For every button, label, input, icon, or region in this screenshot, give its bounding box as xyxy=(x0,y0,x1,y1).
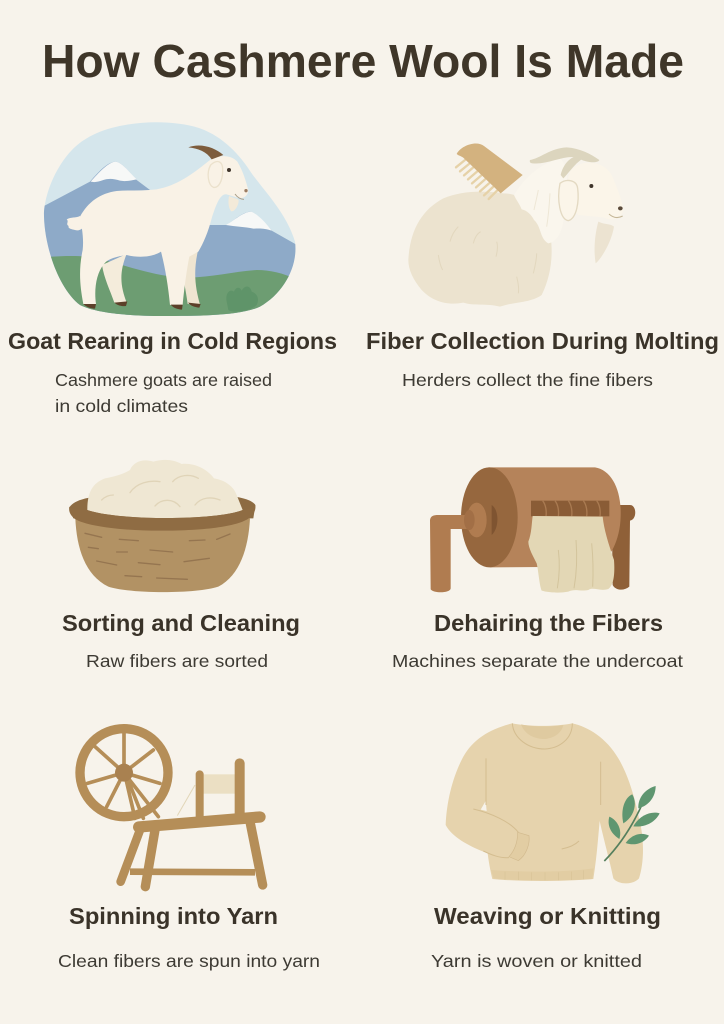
tail xyxy=(67,216,85,230)
icon: basket of raw fibers xyxy=(69,460,255,592)
horns xyxy=(530,147,599,164)
heading: Goat Rearing in Cold Regions xyxy=(8,328,337,354)
fleece body xyxy=(408,192,552,307)
description: Cashmere goats are raised xyxy=(55,370,272,390)
leaf sprig xyxy=(604,786,660,861)
description: Herders collect the fine fibers xyxy=(402,370,653,390)
ear xyxy=(208,162,223,187)
eye and mouth xyxy=(227,168,231,172)
fiber sheet xyxy=(528,516,614,593)
basket body xyxy=(75,518,250,592)
icon: fluffy goat and comb xyxy=(408,144,623,307)
armpit gap xyxy=(481,801,487,811)
head xyxy=(568,163,623,219)
panel: sorting and cleaning xyxy=(62,460,300,671)
hem xyxy=(491,868,594,880)
panel: fiber collection xyxy=(366,144,719,390)
hooves xyxy=(83,301,201,310)
basket rim back xyxy=(69,495,255,518)
front far leg xyxy=(181,245,200,305)
wheel rim xyxy=(80,729,168,817)
crossbar xyxy=(130,862,255,882)
hub xyxy=(467,503,487,537)
crank arm xyxy=(430,515,467,592)
drive struts xyxy=(125,775,158,818)
ear xyxy=(559,181,578,221)
far sleeve xyxy=(572,723,643,883)
collar xyxy=(512,723,572,749)
beard xyxy=(595,222,614,263)
beard xyxy=(228,196,239,211)
drum end xyxy=(461,467,518,567)
heading: Weaving or Knitting xyxy=(434,903,661,929)
heading: Fiber Collection During Molting xyxy=(366,328,719,354)
icon: dehairing machine xyxy=(430,467,635,593)
toothed bar xyxy=(531,501,609,516)
panel: spinning xyxy=(58,729,320,971)
icon: sweater with leaves xyxy=(446,723,660,883)
description: Raw fibers are sorted xyxy=(86,651,268,671)
fiber pile xyxy=(87,460,243,518)
heading: Sorting and Cleaning xyxy=(62,610,300,636)
hub xyxy=(115,764,133,782)
description: in cold climates xyxy=(55,396,188,416)
basket rim xyxy=(69,505,255,531)
sweater body xyxy=(482,723,605,881)
heading: Dehairing the Fibers xyxy=(434,610,663,636)
icon: spinning wheel xyxy=(80,729,263,887)
neck opening xyxy=(521,724,563,739)
icon: goat on mountain landscape xyxy=(44,122,296,316)
table xyxy=(139,817,260,827)
heading: Spinning into Yarn xyxy=(69,903,278,929)
panel: dehairing xyxy=(392,467,683,671)
cuff xyxy=(509,832,529,861)
bobbin posts xyxy=(188,774,212,818)
drum xyxy=(488,467,621,567)
description: Machines separate the undercoat xyxy=(392,651,683,671)
neck wool xyxy=(514,158,567,243)
horn xyxy=(188,145,223,159)
panel: goat rearing xyxy=(8,110,337,416)
description: Yarn is woven or knitted xyxy=(431,951,642,971)
yarn bobbin xyxy=(203,774,235,794)
description: Clean fibers are spun into yarn xyxy=(58,951,320,971)
comb xyxy=(456,144,523,199)
legs xyxy=(121,830,140,882)
near sleeve xyxy=(446,723,529,861)
panel: weaving or knitting xyxy=(431,723,661,971)
goat body xyxy=(80,156,248,305)
back post xyxy=(612,505,635,590)
spokes xyxy=(87,732,160,807)
face details xyxy=(589,184,593,188)
rear far leg xyxy=(102,254,127,303)
title: How Cashmere Wool Is Made xyxy=(42,35,684,87)
